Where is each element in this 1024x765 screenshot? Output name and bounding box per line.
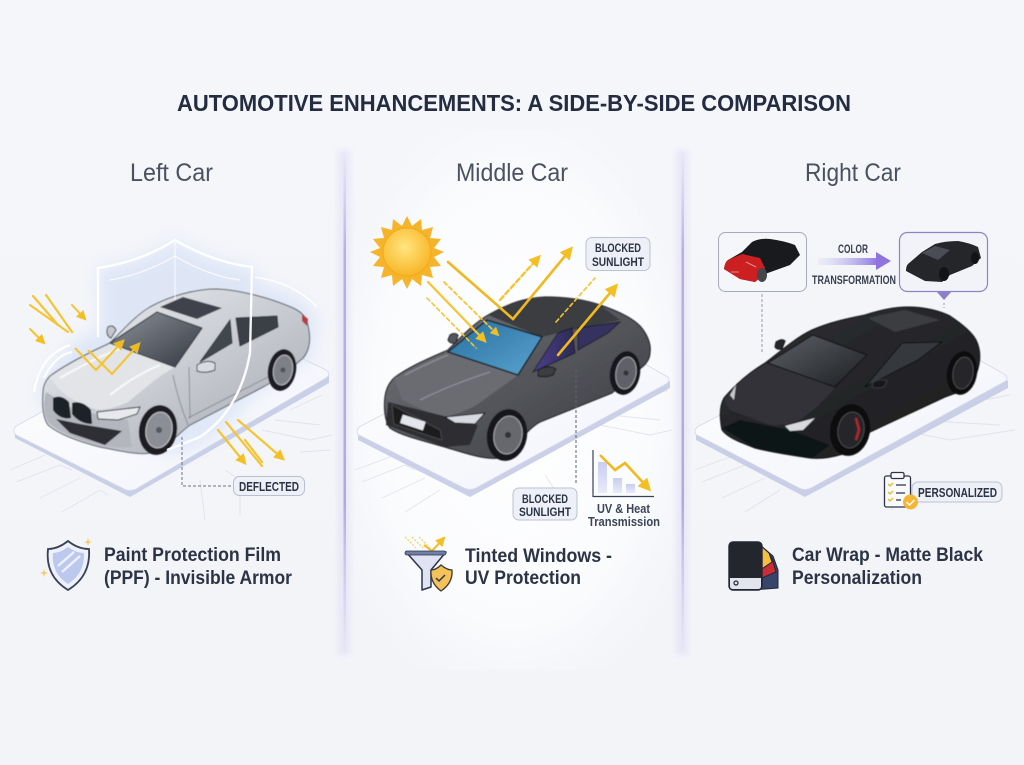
deflected rays	[218, 420, 282, 466]
text: car wrap label: Personalization	[792, 568, 922, 589]
callout: personalized: PERSONALIZED	[918, 486, 997, 500]
block: tinted windows	[405, 537, 617, 591]
shield glow	[38, 240, 318, 455]
circuit traces left	[10, 395, 332, 520]
inset: before car with red paint	[718, 232, 806, 292]
text: PPF label: Paint Protection Film	[104, 545, 281, 566]
icon: funnel with shield	[405, 537, 452, 591]
sunlight rays and reflected arrows	[427, 250, 615, 355]
divider: middle and right columns	[676, 150, 688, 655]
icon: sun	[370, 216, 444, 289]
heading: left car: Left Car	[130, 159, 213, 187]
title: AUTOMOTIVE ENHANCEMENTS: A SIDE-BY-SIDE COMPARISON	[177, 90, 851, 116]
platform	[695, 320, 1008, 497]
divider: left and middle columns	[338, 150, 350, 655]
chart: UV and heat transmission	[588, 450, 660, 529]
callout: deflected	[182, 437, 304, 496]
text: PPF label: (PPF) - Invisible Armor	[104, 568, 293, 589]
incoming yellow rays	[30, 295, 84, 342]
text: tinted windows label: UV Protection	[465, 568, 581, 589]
text: transformation: TRANSFORMATION	[812, 275, 896, 287]
block: car wrap	[729, 542, 988, 590]
reflected arrows on hood	[75, 342, 138, 374]
circuit traces right	[695, 395, 1015, 512]
text: tinted windows label: Tinted Windows -	[465, 546, 612, 567]
heading: right car: Right Car	[805, 159, 901, 187]
inset: after car matte black	[900, 232, 988, 308]
heading: middle car: Middle Car	[456, 159, 568, 187]
dashed leader left	[761, 294, 763, 352]
callout: blocked sunlight bottom	[513, 488, 577, 520]
callout: blocked sunlight top: SUNLIGHT	[592, 255, 645, 269]
arrow: transformation	[818, 252, 891, 270]
callout: blocked sunlight top	[586, 238, 650, 270]
chart: UV and heat transmission: UV & Heat	[597, 502, 651, 516]
icon: checklist clipboard	[884, 472, 918, 510]
callout: blocked sunlight bottom: BLOCKED	[522, 492, 568, 506]
dashed leader line	[575, 370, 577, 484]
icon: colour swatches	[729, 542, 778, 590]
icon: shield	[40, 538, 92, 590]
callout: blocked sunlight top: BLOCKED	[595, 241, 641, 255]
platform	[357, 320, 670, 497]
text: car wrap label: Car Wrap - Matte Black	[792, 545, 983, 566]
platform	[14, 318, 329, 497]
callout: personalized	[912, 482, 1002, 502]
car: matte black supercar	[720, 307, 981, 459]
car: graphite sportback	[385, 297, 650, 464]
callout: blocked sunlight bottom: SUNLIGHT	[519, 505, 572, 519]
text: color: COLOR	[838, 244, 868, 256]
block: paint protection film	[40, 538, 293, 590]
callout: deflected: DEFLECTED	[239, 480, 299, 494]
protective shield outline	[34, 240, 317, 450]
chart: UV and heat transmission: Transmission	[588, 515, 660, 529]
panel: left car PPF	[10, 240, 332, 520]
panel: right car wrap	[695, 232, 1015, 512]
circuit traces middle	[355, 390, 672, 512]
panel: middle car tinted windows	[355, 216, 672, 529]
car: silver sedan	[43, 289, 310, 458]
